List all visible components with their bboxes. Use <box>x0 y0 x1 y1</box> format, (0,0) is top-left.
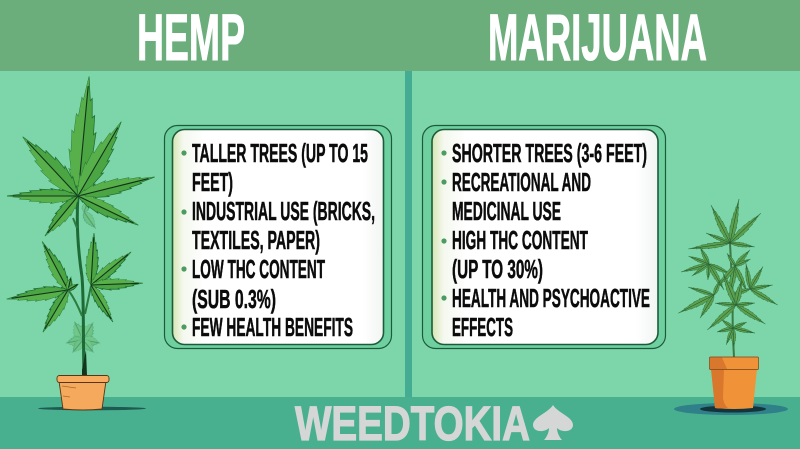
panel: marijuana facts: HIGH THC CONTENT <box>452 225 588 255</box>
header band <box>0 0 800 71</box>
panel: marijuana facts <box>422 126 666 348</box>
icon: short marijuana plant in pot <box>674 198 788 415</box>
center divider <box>405 71 412 397</box>
panel: marijuana facts: RECREATIONAL AND <box>452 167 591 197</box>
panel: hemp facts: LOW THC CONTENT <box>192 254 325 284</box>
panel: hemp facts: FEET) <box>192 167 233 197</box>
panel: marijuana facts: EFFECTS <box>452 312 513 342</box>
panel: hemp facts: FEW HEALTH BENEFITS <box>192 312 353 342</box>
panel: hemp facts: TALLER TREES (UP TO 15 <box>192 138 368 168</box>
panel: hemp facts: INDUSTRIAL USE (BRICKS, <box>192 196 375 226</box>
heading: hemp: HEMP <box>137 0 245 74</box>
panel: marijuana facts: SHORTER TREES (3-6 FEET) <box>452 138 647 168</box>
floor band <box>0 397 800 449</box>
icon: spade <box>533 405 573 440</box>
panel: marijuana facts: (UP TO 30%) <box>452 254 543 284</box>
icon: tall hemp plant in pot <box>6 75 157 410</box>
panel: hemp facts <box>164 126 392 348</box>
panel: marijuana facts: MEDICINAL USE <box>452 196 561 226</box>
panel: hemp facts: TEXTILES, PAPER) <box>192 225 320 255</box>
panel: hemp facts: (SUB 0.3%) <box>192 284 276 314</box>
